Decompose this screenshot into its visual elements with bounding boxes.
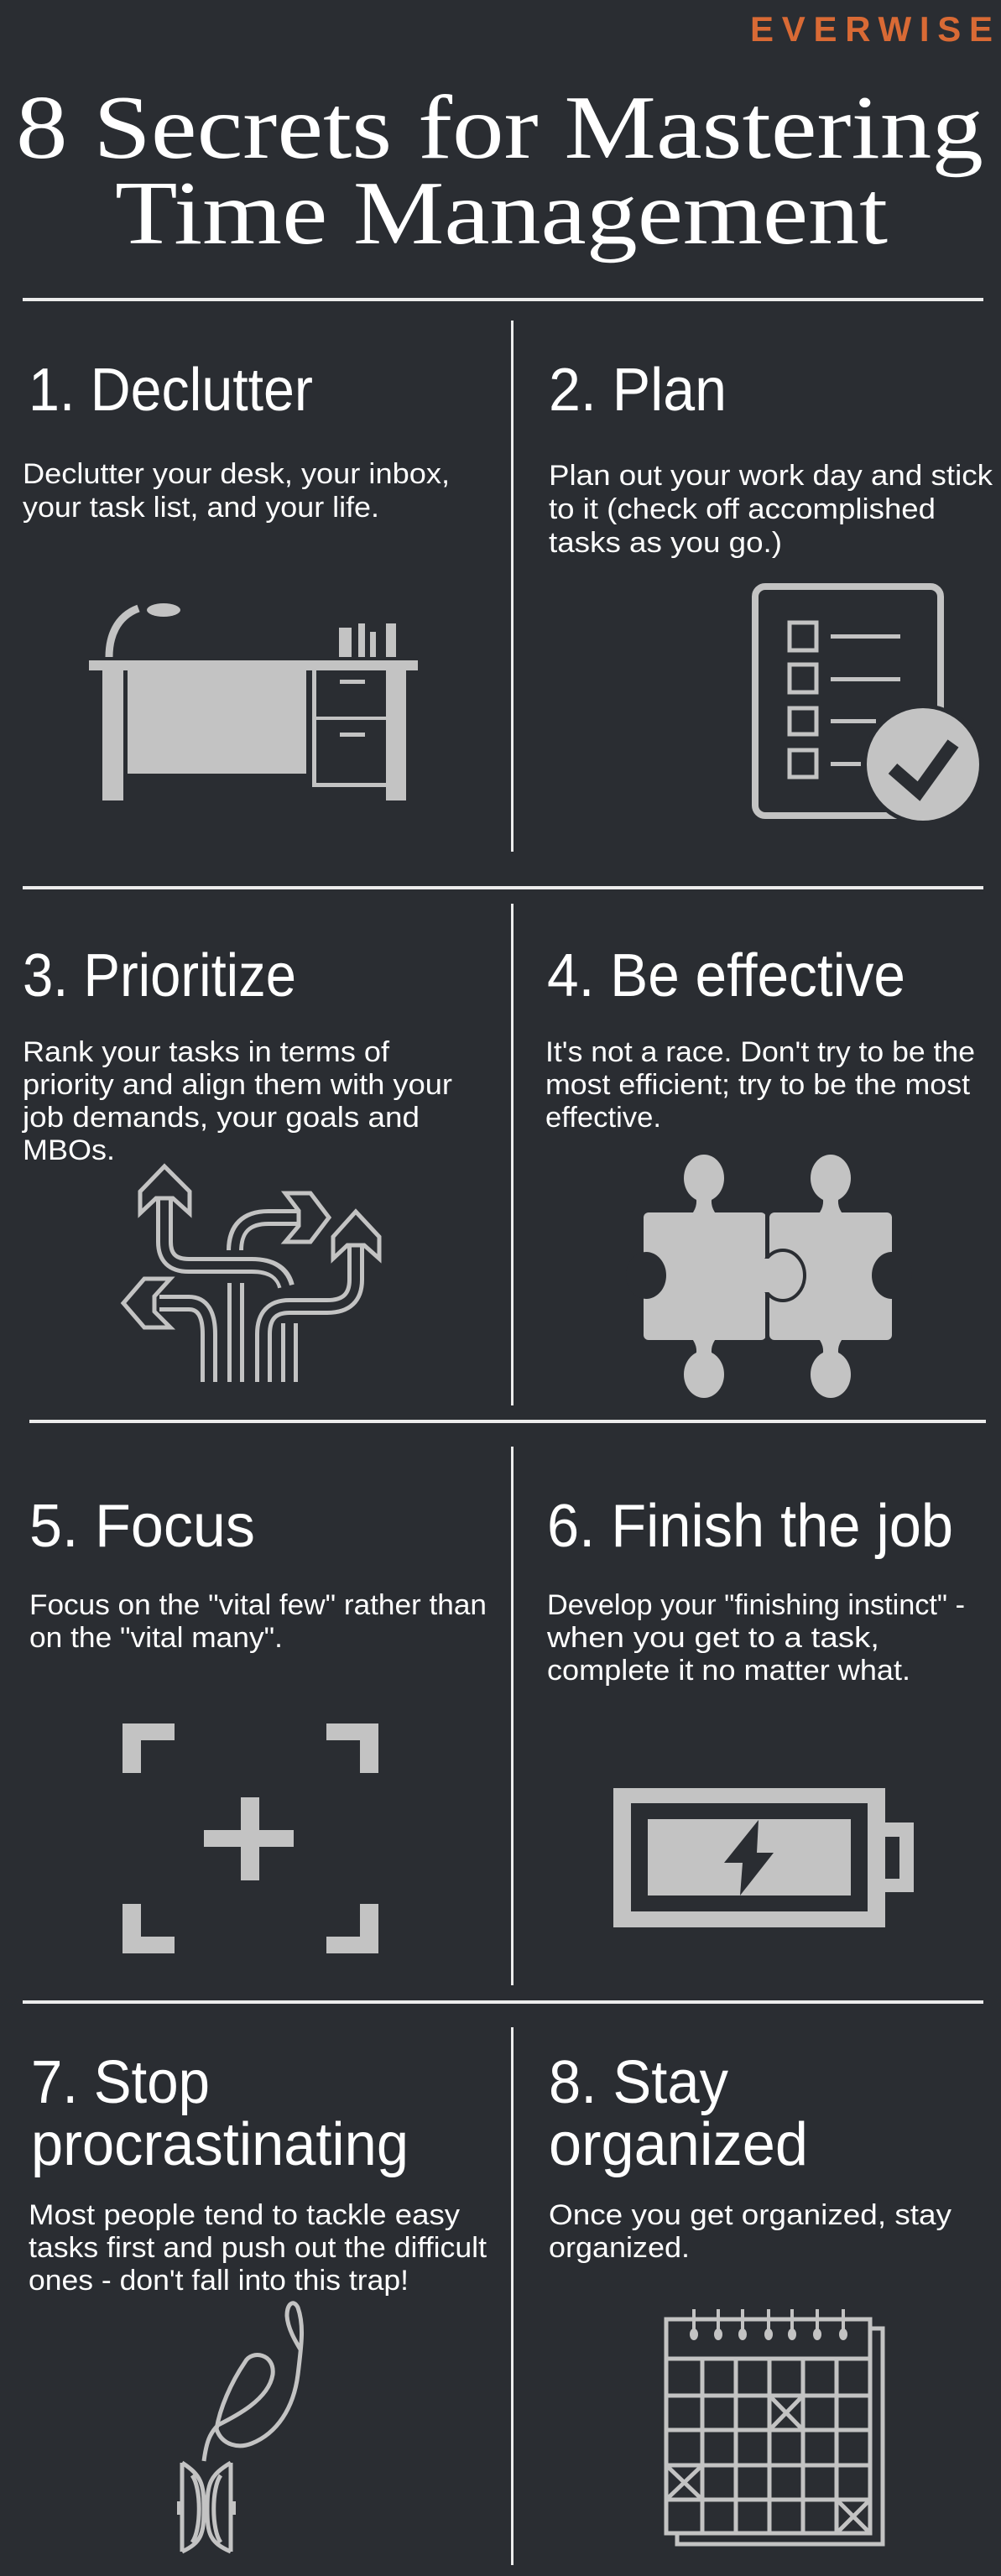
heading: 6. Finish the job: 6. Finish the job [547, 1493, 953, 1560]
panel: 8 stay organized [549, 2049, 951, 2544]
panel: 2 plan [549, 357, 993, 825]
text: effective body: effective. [545, 1102, 661, 1134]
icon: focus brackets [123, 1723, 378, 1953]
panel: 4 be effective [545, 942, 975, 1398]
text: effective body [545, 1036, 975, 1134]
heading: 1. Declutter: 1. Declutter [29, 357, 313, 424]
icon: calendar [666, 2309, 883, 2544]
logo: EVERWISE: EVERWISE [750, 9, 993, 49]
text: procrastinating body: Most people tend to tackle easy [29, 2199, 460, 2231]
text: plan body [549, 460, 993, 559]
heading: 7. Stop procrastinating: procrastinating [31, 2111, 409, 2178]
text: effective body: It's not a race. Don't try to be the [545, 1036, 975, 1068]
title [16, 78, 983, 263]
text: declutter body: Declutter your desk, your inbox, [23, 458, 450, 490]
text: procrastinating body: tasks first and push out the difficult [29, 2232, 487, 2264]
text: finish body [546, 1589, 965, 1687]
title: Time Management [115, 164, 888, 263]
icon: desk [89, 603, 418, 800]
panel: 6 finish the job [546, 1493, 965, 1927]
panel: 1 declutter [23, 357, 450, 800]
panel: 7 stop procrastinating [29, 2049, 487, 2552]
text: procrastinating body [29, 2199, 487, 2297]
heading: 8. Stay organized [549, 2049, 808, 2178]
text: procrastinating body: ones - don't fall into this trap! [29, 2265, 409, 2297]
panel: 5 focus [29, 1493, 487, 1953]
text: prioritize body: priority and align them with your [23, 1069, 452, 1101]
heading: 2. Plan: 2. Plan [549, 357, 727, 424]
icon: arrows [123, 1166, 379, 1384]
text: finish body: Develop your "finishing instinct" - [547, 1589, 965, 1621]
text: plan body: tasks as you go.) [549, 527, 782, 559]
text: focus body: on the "vital many". [29, 1622, 283, 1654]
text: organized body: Once you get organized, stay [549, 2199, 951, 2231]
icon: battery [613, 1788, 914, 1927]
title: 8 Secrets for Mastering [16, 78, 983, 178]
heading: 7. Stop procrastinating [31, 2049, 409, 2178]
icon: checklist [755, 587, 983, 825]
panel: 3 prioritize [22, 942, 452, 1384]
text: prioritize body: MBOs. [23, 1134, 115, 1166]
text: organized body [549, 2199, 951, 2264]
text: prioritize body [22, 1036, 452, 1166]
heading: 5. Focus: 5. Focus [29, 1493, 255, 1560]
text: effective body: most efficient; try to be the most [545, 1069, 971, 1101]
text: declutter body: your task list, and your life. [23, 492, 379, 524]
text: focus body: Focus on the "vital few" rather than [29, 1589, 487, 1621]
text: plan body: Plan out your work day and stick [549, 460, 993, 492]
text: finish body: complete it no matter what. [547, 1655, 910, 1687]
text: prioritize body: Rank your tasks in terms of [23, 1036, 390, 1068]
text: prioritize body: job demands, your goals and [22, 1102, 420, 1134]
text: focus body [29, 1589, 487, 1654]
text: organized body: organized. [549, 2232, 690, 2264]
icon: yoyo [182, 2303, 302, 2552]
icon: puzzle [626, 1155, 912, 1398]
text: finish body: when you get to a task, [546, 1622, 879, 1654]
heading: 3. Prioritize: 3. Prioritize [23, 942, 296, 1009]
text: declutter body [23, 458, 450, 524]
heading: 8. Stay organized: organized [549, 2111, 808, 2178]
heading: 7. Stop procrastinating: 7. Stop [31, 2049, 210, 2116]
heading: 4. Be effective: 4. Be effective [547, 942, 905, 1009]
text: plan body: to it (check off accomplished [549, 493, 936, 525]
heading: 8. Stay organized: 8. Stay [549, 2049, 728, 2116]
